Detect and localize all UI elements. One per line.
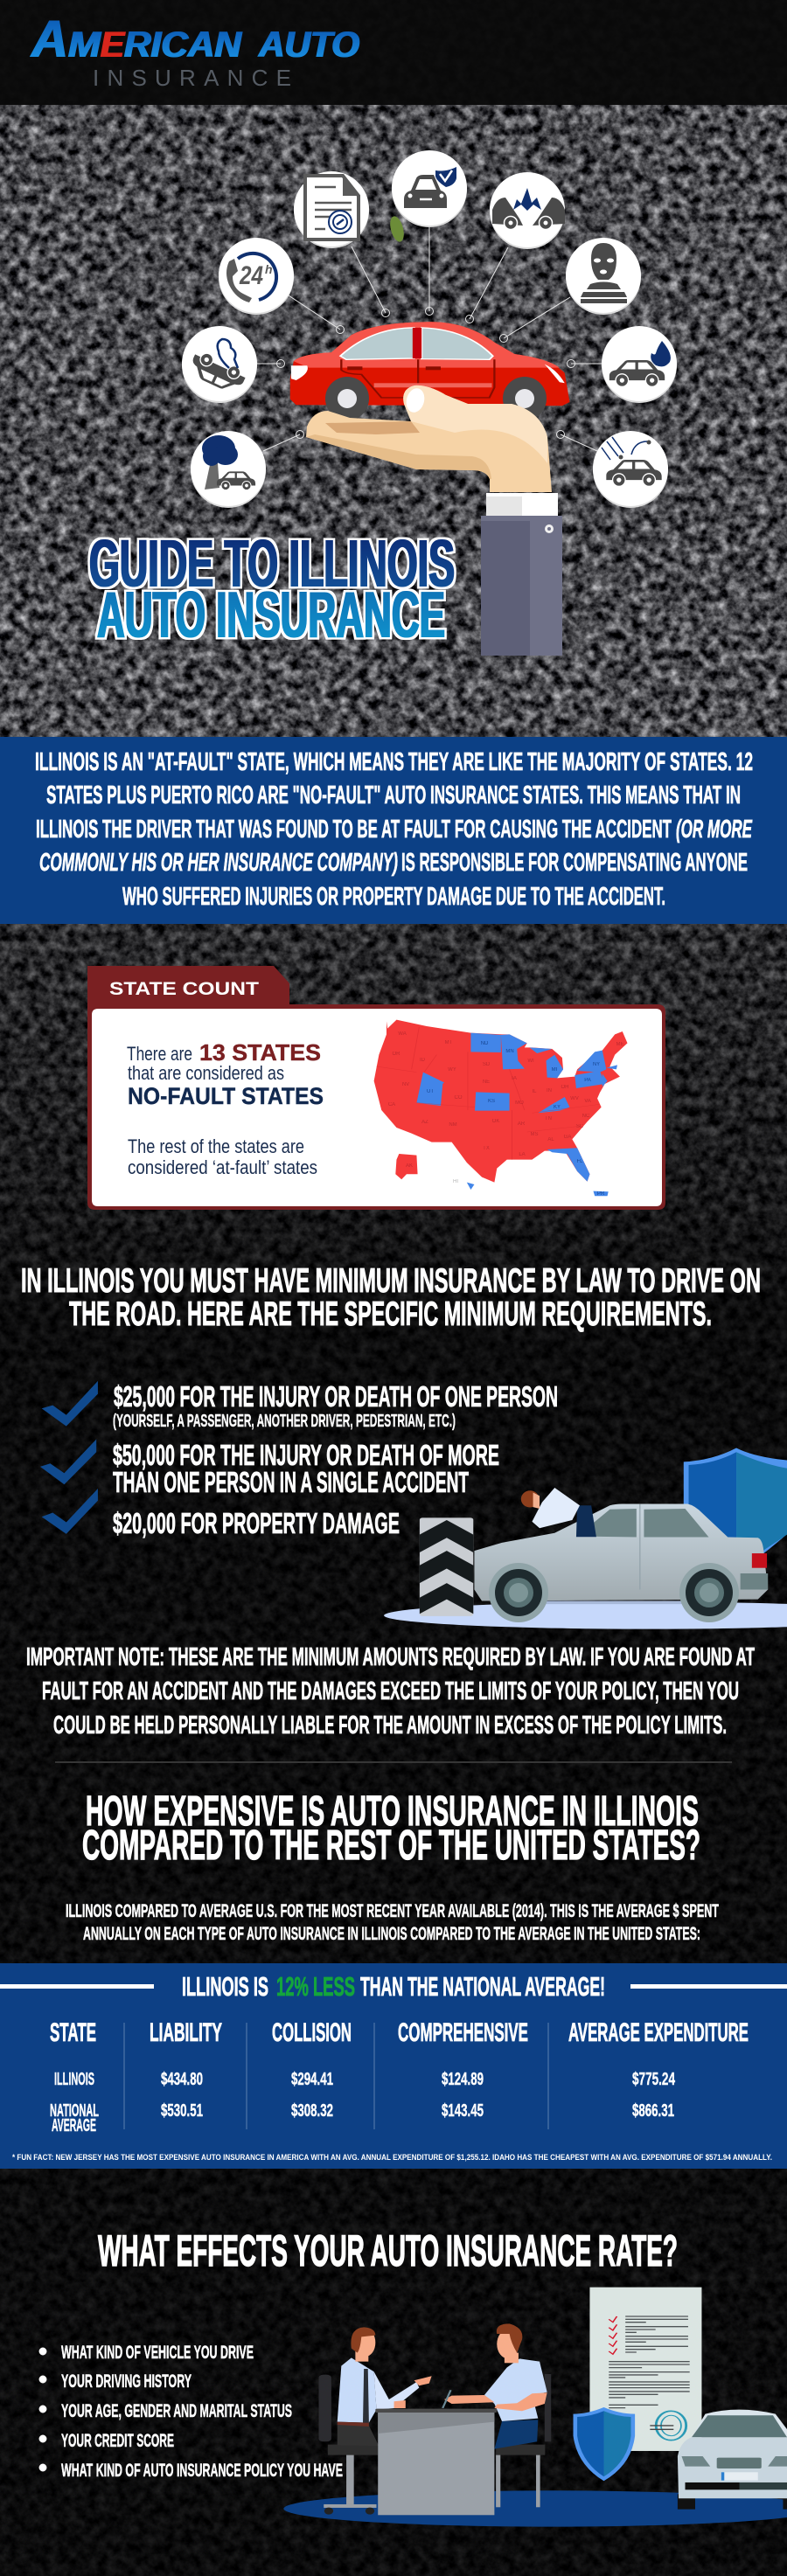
rate factors list: YOUR AGE, GENDER AND MARITAL STATUS [61, 2400, 292, 2421]
no-fault state text [127, 1039, 324, 1178]
state labels: UT [427, 1089, 434, 1094]
state labels: MO [515, 1101, 524, 1106]
no-fault state text: The rest of the states are [128, 1135, 304, 1157]
man on the left with chair [318, 2327, 432, 2515]
state labels: IA [512, 1076, 517, 1081]
important note [26, 1643, 755, 1739]
panel: state count [87, 966, 665, 1210]
icon: overturned car with smoke [182, 326, 257, 403]
state labels: NM [449, 1122, 457, 1128]
state labels: SC [576, 1124, 584, 1129]
icon: car crash [490, 172, 565, 249]
state labels: MS [530, 1132, 539, 1137]
illustration: insurance meeting, policy, shield and car [283, 2288, 787, 2527]
dark overlay on lower asphalt [0, 924, 787, 2576]
state labels: KS [488, 1099, 495, 1104]
US map of no-fault states [374, 1020, 628, 1197]
state labels: OH [561, 1085, 568, 1090]
state labels: AK [406, 1163, 413, 1169]
row: Illinois: $434.80 [161, 2070, 203, 2089]
table heading: THAN THE NATIONAL AVERAGE! [360, 1971, 605, 2002]
table column headers: COLLISION [272, 2018, 352, 2047]
table heading: ILLINOIS IS [182, 1971, 268, 2002]
state labels: WA [398, 1031, 407, 1037]
row: national average: $308.32 [291, 2101, 333, 2121]
state labels: SD [483, 1062, 491, 1067]
requirements list: THAN ONE PERSON IN A SINGLE ACCIDENT [113, 1466, 469, 1498]
table column headers: LIABILITY [150, 2018, 222, 2047]
logo: American Auto Insurance: AUTO [258, 24, 359, 65]
white card [92, 1009, 662, 1206]
icon: 24 hour support: 24 [239, 261, 263, 290]
logo: American Auto Insurance: INSURANCE [93, 65, 291, 91]
no-fault state text: NO-FAULT STATES [128, 1083, 324, 1109]
row: Illinois: $124.89 [442, 2070, 484, 2089]
desk [375, 2409, 497, 2515]
state labels: AR [518, 1121, 526, 1127]
illustration: car crash with shield and barrier [384, 1448, 787, 1629]
no-fault state text: There are [127, 1043, 192, 1065]
row: national average: NATIONAL [50, 2101, 99, 2121]
state labels: WI [527, 1059, 534, 1064]
requirements list: $20,000 FOR PROPERTY DAMAGE [113, 1507, 400, 1539]
heading: minimum insurance [21, 1262, 761, 1333]
state labels: NV [402, 1082, 409, 1087]
state labels: NY [593, 1062, 600, 1067]
man on the right with chair [442, 2323, 551, 2507]
requirements list: (YOURSELF, A PASSENGER, ANOTHER DRIVER, PEDESTRIAN, ETC.) [113, 1412, 456, 1431]
icon: tree on car [191, 431, 266, 508]
state labels: NE [483, 1080, 490, 1085]
rate factors list [39, 2342, 343, 2481]
requirements list: $50,000 FOR THE INJURY OR DEATH OF MORE [113, 1439, 499, 1471]
header bar [0, 0, 787, 105]
title: GUIDE TO ILLINOIS [89, 526, 455, 601]
check marks [40, 1381, 98, 1534]
icon: thief mask [566, 238, 641, 315]
comparison subtitle [66, 1901, 719, 1944]
state labels: TN [545, 1116, 552, 1121]
no-fault state text: that are considered as [128, 1062, 284, 1084]
blue floor ellipse [283, 2490, 787, 2527]
table heading [0, 1971, 787, 2002]
state labels: ID [420, 1058, 426, 1063]
state labels: MT [445, 1040, 453, 1045]
requirements list [113, 1380, 558, 1539]
hand with shirt cuff and sleeve [306, 385, 562, 656]
heading: how expensive [82, 1788, 700, 1869]
state labels: NC [582, 1114, 590, 1119]
table column headers: COMPREHENSIVE [398, 2018, 528, 2047]
logo: American Auto Insurance: M [68, 24, 101, 65]
row: Illinois: $294.41 [291, 2070, 333, 2089]
row: national average: $530.51 [161, 2101, 203, 2121]
state labels: KY [554, 1105, 561, 1110]
no-fault state text: considered ‘at-fault’ states [128, 1156, 317, 1178]
state labels: AZ [421, 1120, 428, 1125]
title [89, 526, 455, 651]
state labels: OR [392, 1052, 400, 1057]
state labels: HI [453, 1179, 458, 1184]
no-fault state text: 13 STATES [199, 1039, 321, 1066]
state labels: GA [564, 1135, 571, 1140]
rate factors list: WHAT KIND OF AUTO INSURANCE POLICY YOU HAVE [61, 2460, 343, 2481]
logo: American Auto Insurance: E [101, 24, 126, 65]
shield [574, 2407, 635, 2481]
row: Illinois [54, 2070, 676, 2089]
rate factors list: WHAT KIND OF VEHICLE YOU DRIVE [61, 2342, 254, 2363]
tab label: STATE COUNT [109, 979, 259, 999]
tab and frame [87, 966, 665, 1210]
logo: American Auto Insurance: RICAN [124, 24, 243, 65]
icon: hail damage [593, 431, 668, 508]
state labels: AL [547, 1137, 554, 1142]
state labels: CO [455, 1095, 463, 1101]
rate factors list: YOUR DRIVING HISTORY [61, 2371, 192, 2392]
table column headers: STATE [50, 2018, 96, 2047]
panel: comparison table [0, 1963, 787, 2169]
title: AUTO INSURANCE [97, 578, 445, 651]
state labels: ME [616, 1042, 624, 1047]
state labels: MN [505, 1049, 514, 1054]
state labels: PR [597, 1191, 605, 1197]
state labels: MI [552, 1067, 558, 1073]
row: Illinois: ILLINOIS [54, 2070, 94, 2089]
logo: American Auto Insurance: A [30, 10, 68, 68]
state labels: IN [547, 1088, 552, 1094]
connector lines and nodes [257, 227, 602, 451]
table column headers [50, 2018, 749, 2047]
state labels: FL [576, 1159, 583, 1164]
icon: car with shield [392, 150, 467, 227]
state labels: PA [584, 1078, 591, 1083]
state labels: VA [584, 1099, 591, 1104]
rate factors list: YOUR CREDIT SCORE [61, 2430, 174, 2451]
icon: 24 hour support [219, 238, 294, 315]
state labels: TX [483, 1146, 490, 1151]
table heading: 12% LESS [276, 1971, 355, 2002]
state labels: LA [519, 1152, 526, 1157]
policy document [589, 2288, 701, 2451]
state labels [388, 1031, 624, 1197]
row: national average: $143.45 [442, 2101, 484, 2121]
blue band intro text [0, 737, 787, 924]
state labels: WV [570, 1096, 579, 1101]
state labels: IL [532, 1089, 537, 1094]
icon: document with seal [294, 171, 369, 248]
row: national average: $866.31 [632, 2101, 674, 2121]
row: national average: AVERAGE [52, 2116, 96, 2135]
state labels: CA [388, 1102, 395, 1107]
state labels: ND [481, 1041, 489, 1046]
blue band intro text: COMMONLY HIS OR HER INSURANCE COMPANY) [39, 849, 398, 877]
red car held in hand [290, 322, 569, 420]
row: Illinois: $775.24 [632, 2070, 676, 2089]
icon: 24 hour support: h [265, 262, 273, 276]
state labels: WY [448, 1067, 456, 1073]
silver car front [678, 2410, 787, 2510]
row: national average [50, 2101, 674, 2135]
state labels: OK [492, 1119, 499, 1124]
icon: car on fire [602, 326, 677, 403]
leaf on asphalt [387, 215, 407, 243]
logo: American Auto Insurance [30, 10, 359, 91]
